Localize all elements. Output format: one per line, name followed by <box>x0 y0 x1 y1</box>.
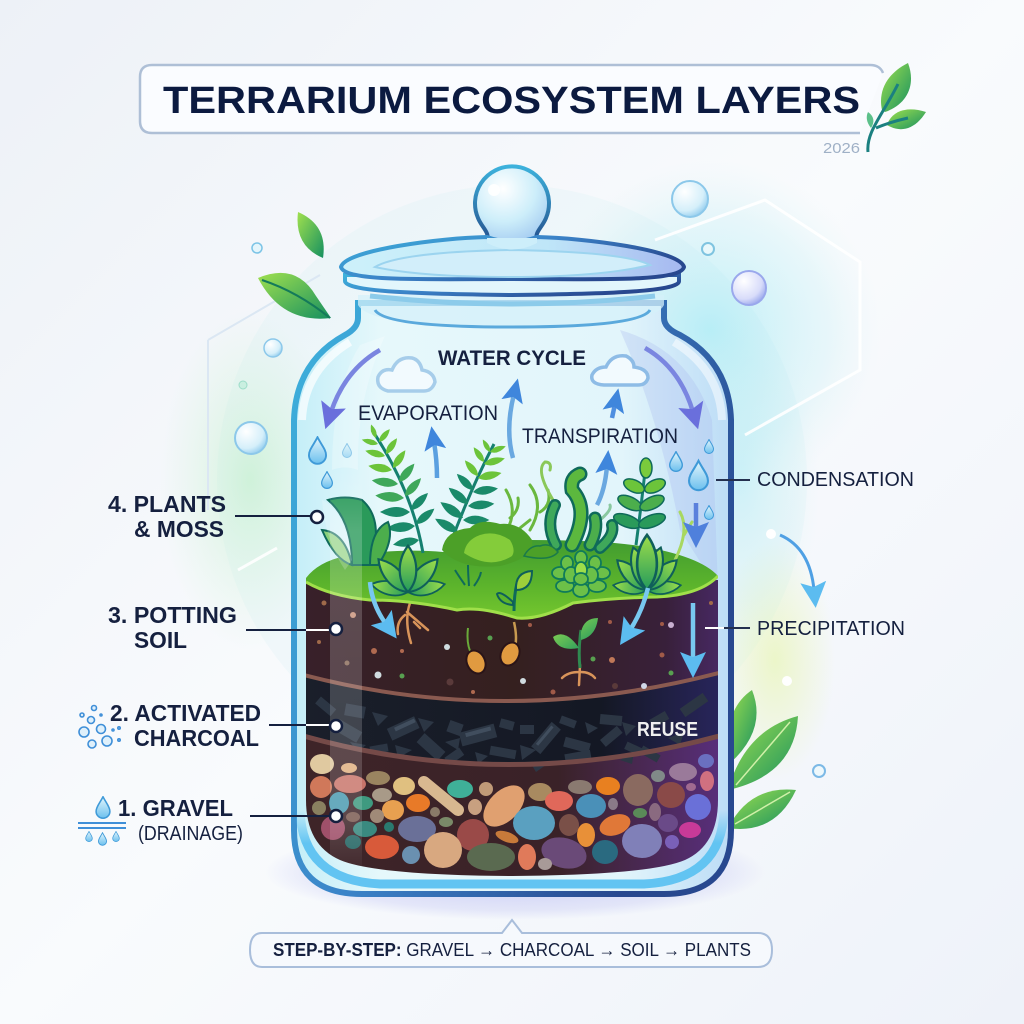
seeds <box>466 622 520 674</box>
right rosette <box>612 535 682 596</box>
water droplets <box>309 437 714 520</box>
decorative bubbles <box>235 181 825 777</box>
callout: precipitation: PRECIPITATION <box>757 618 905 640</box>
gravel layer <box>306 738 718 876</box>
jar <box>294 303 731 894</box>
charcoal to gravel divider <box>300 733 730 765</box>
wavy water plant <box>550 474 612 548</box>
icon: drainage drops <box>78 797 126 845</box>
seedling <box>497 571 532 611</box>
middle succulent <box>552 551 610 597</box>
callout: 3 potting soil: SOIL <box>134 627 187 653</box>
arrow: precipitation curve <box>766 529 814 590</box>
soil seedling <box>553 618 598 668</box>
callout: condensation: CONDENSATION <box>757 469 914 491</box>
broad leaf plant <box>322 498 390 565</box>
potting soil layer <box>300 580 730 701</box>
callout: 3 potting soil: 3. POTTING <box>108 602 237 628</box>
callout: 4 plants and moss <box>108 491 323 542</box>
background glows <box>160 160 880 780</box>
neck rings <box>358 295 664 328</box>
title box <box>140 65 883 133</box>
label: evaporation: EVAPORATION <box>358 402 498 425</box>
icon: leaves bottom right <box>727 690 798 829</box>
step-by-step banner <box>250 920 772 967</box>
callout: 2 activated charcoal: CHARCOAL <box>134 725 259 751</box>
plants <box>322 424 692 611</box>
moss surface <box>306 537 718 618</box>
callout: 2 activated charcoal: 2. ACTIVATED <box>110 700 261 726</box>
clouds <box>378 356 648 391</box>
inner glass panels <box>620 330 718 590</box>
callout: 4 plants and moss: & MOSS <box>134 516 224 542</box>
charcoal layer <box>300 670 730 772</box>
step-by-step banner: STEP-BY-STEP: GRAVEL → CHARCOAL → SOIL → PLANTS <box>273 940 751 960</box>
jar shadow <box>265 824 765 920</box>
label: transpiration: TRANSPIRATION <box>522 425 678 448</box>
small grass sprouts <box>455 565 481 586</box>
bottom glass band <box>300 810 724 884</box>
icon: floating leaves left <box>258 212 331 319</box>
knob <box>475 166 549 241</box>
label: water cycle: WATER CYCLE <box>438 347 586 370</box>
fern left <box>361 424 437 553</box>
water cycle arrows <box>331 348 696 660</box>
callout: 1 gravel drainage <box>118 795 342 845</box>
title: TERRARIUM ECOSYSTEM LAYERS <box>163 80 860 122</box>
jar neck and lid <box>341 166 684 328</box>
icon: charcoal filter dots <box>79 706 120 748</box>
soil and stone layers <box>300 537 730 880</box>
year label: 2026 <box>823 140 860 157</box>
roots <box>398 603 595 685</box>
icon: title leaf sprig <box>867 63 926 152</box>
moss mound <box>442 522 558 567</box>
callout: 4 plants and moss: 4. PLANTS <box>108 491 226 517</box>
fern middle <box>433 438 507 545</box>
left rosette <box>370 546 446 599</box>
callout: 2 activated charcoal <box>110 700 342 751</box>
lid <box>341 237 684 279</box>
jar body <box>294 303 731 894</box>
label: reuse: REUSE <box>637 719 698 741</box>
jar glass highlight <box>322 336 385 880</box>
callout: 1 gravel drainage: (DRAINAGE) <box>138 823 243 845</box>
curly sprouts <box>506 462 692 560</box>
callout: 1 gravel drainage: 1. GRAVEL <box>118 795 233 821</box>
fern right <box>612 458 668 545</box>
callout: 3 potting soil <box>108 602 342 653</box>
